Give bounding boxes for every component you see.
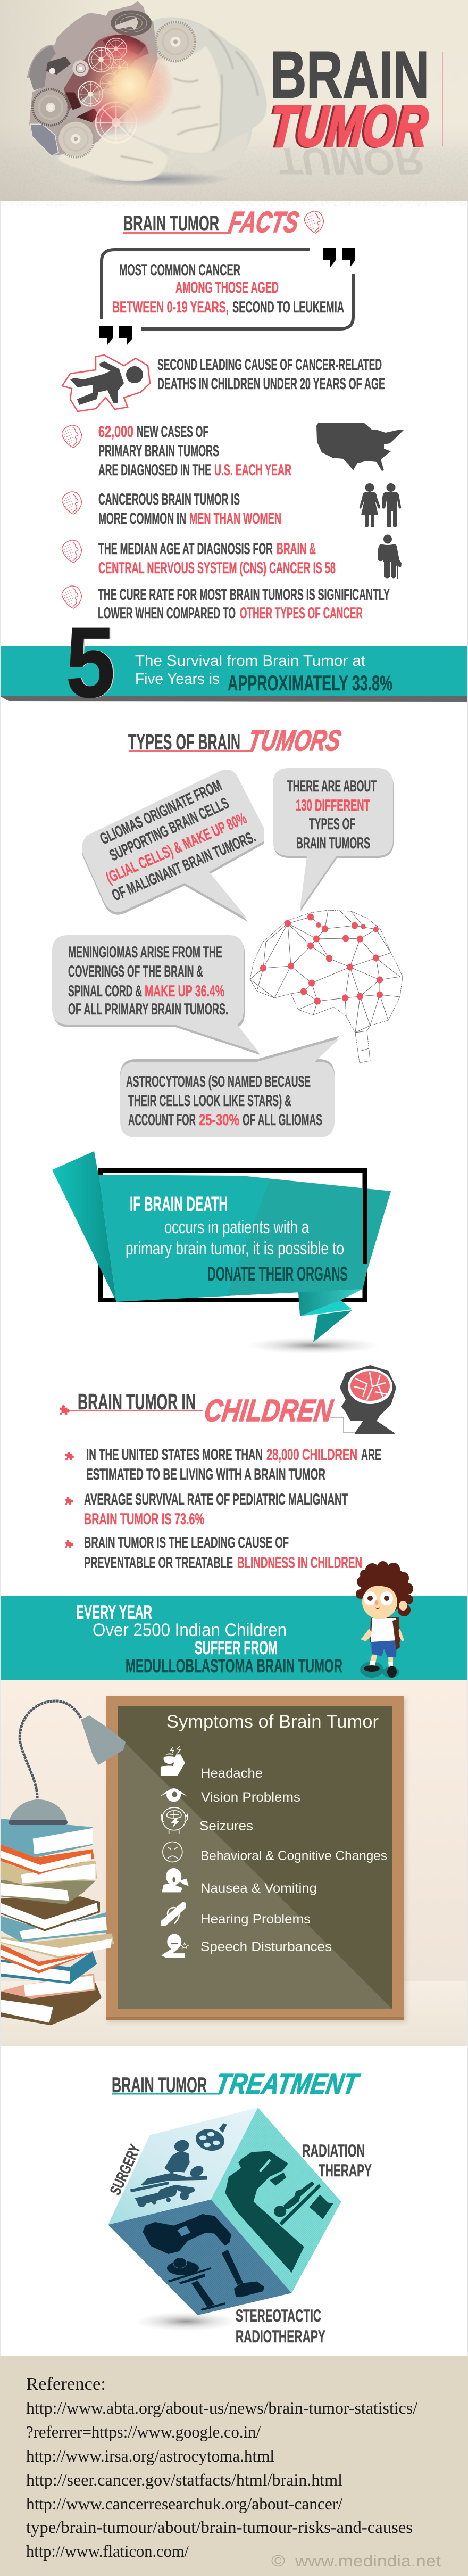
gear: bottom xyxy=(57,120,94,157)
survival banner: APPROXIMATELY 33.8% xyxy=(228,672,392,695)
icon: person vomiting xyxy=(162,1868,189,1892)
chalkboard xyxy=(106,1696,404,2020)
symptom: nausea: Nausea & Vomiting xyxy=(200,1881,317,1896)
icon: brain xyxy=(62,492,81,514)
label: stereotactic radiotherapy: RADIOTHERAPY xyxy=(236,2327,325,2346)
speech bubble: meningiomas: COVERINGS OF THE BRAIN & xyxy=(68,963,203,980)
label: radiation therapy: THERAPY xyxy=(319,2161,372,2180)
heading: brain tumor treatment: TREATMENT xyxy=(213,2067,362,2100)
survival banner: Five Years is xyxy=(135,671,220,688)
fact: men than women: MEN THAN WOMEN xyxy=(189,510,281,527)
speech bubble: gliomas: OF MALIGNANT BRAIN TUMORS. xyxy=(110,828,258,904)
speech bubble: 130 types: THERE ARE ABOUT xyxy=(287,778,377,795)
icon: elderly person with cane xyxy=(378,534,402,579)
icon: USA map xyxy=(316,423,404,471)
fact: 62,000 new cases: 62,000 xyxy=(98,423,133,441)
glowing centre xyxy=(85,41,174,129)
fact: men than women: MORE COMMON IN xyxy=(98,510,186,527)
quote text xyxy=(112,261,344,316)
icon: brain xyxy=(305,211,323,233)
fact: 62,000 new cases: U.S. EACH YEAR xyxy=(214,461,291,479)
speech bubble: astrocytomas: THEIR CELLS LOOK LIKE STARS) & xyxy=(128,1092,291,1110)
panel: references: http://www.irsa.org/astrocytoma.html xyxy=(26,2446,274,2465)
mechanical plate xyxy=(27,1,158,156)
origami ribbon: brain death organ donation xyxy=(52,1151,391,1354)
icon: closing quote marks xyxy=(323,248,355,267)
fact: median age: THE MEDIAN AGE AT DIAGNOSIS FOR xyxy=(98,540,273,558)
watermark: www.medindia.net xyxy=(295,2552,441,2570)
panel: references: ?referrer=https://www.google.co.in/ xyxy=(26,2422,261,2441)
symptom: vision: Vision Problems xyxy=(201,1790,300,1805)
symptom: headache: Headache xyxy=(200,1766,263,1781)
icon: person with hand at mouth xyxy=(161,1934,189,1958)
fact: 62,000 new cases: PRIMARY BRAIN TUMORS xyxy=(98,442,219,460)
label: stereotactic radiotherapy: STEREOTACTIC xyxy=(236,2306,321,2325)
label: stereotactic radiotherapy xyxy=(236,2306,325,2346)
cube: treatment options xyxy=(107,2108,372,2346)
bullet: blindness: BLINDNESS IN CHILDREN xyxy=(237,1554,362,1572)
bullet: blindness: BRAIN TUMOR IS THE LEADING CAUSE OF xyxy=(84,1534,289,1551)
symptom: hearing xyxy=(161,1902,311,1927)
fact: median age: BRAIN & xyxy=(277,540,316,558)
speech bubble: 130 types: BRAIN TUMORS xyxy=(296,835,370,852)
illustration: desk lamp xyxy=(9,1701,126,1825)
survival banner xyxy=(0,606,468,718)
symptom: speech xyxy=(161,1934,332,1958)
quote text: AMONG THOSE AGED xyxy=(176,279,279,296)
heading: brain tumor facts: BRAIN TUMOR xyxy=(123,212,219,235)
label: radiation therapy: RADIATION xyxy=(302,2141,365,2160)
symptom: seizures xyxy=(161,1807,253,1834)
dark inner cavity xyxy=(64,35,149,110)
origami ribbon: brain death organ donation: occurs in patients with a xyxy=(164,1217,309,1237)
symptom: headache xyxy=(161,1746,263,1781)
speech bubble: 130 types xyxy=(273,768,393,909)
icon: head with lightning xyxy=(161,1807,187,1834)
icon: headache xyxy=(161,1746,185,1776)
heading: brain tumor treatment: BRAIN TUMOR xyxy=(112,2074,207,2097)
illustration: stack of books xyxy=(0,1819,114,2025)
icon: eye xyxy=(160,1788,187,1802)
origami ribbon: brain death organ donation: DONATE THEIR ORGANS xyxy=(207,1263,348,1285)
label: surgery: SURGERY xyxy=(107,2142,144,2198)
heading: brain tumor treatment xyxy=(112,2067,362,2100)
fact: cure rate xyxy=(62,586,390,622)
big number 5: 5 xyxy=(66,606,115,718)
bullet: 28,000 children: IN THE UNITED STATES MORE THAN xyxy=(86,1446,263,1464)
hero banner xyxy=(0,0,468,201)
gear: upper right xyxy=(156,22,195,61)
panel: references: http://www.cancerresearchuk.org/about-cancer/ xyxy=(26,2494,342,2513)
panel: references: http://www.abta.org/about-us/news/brain-tumor-statistics/ xyxy=(26,2398,417,2417)
icon: woman and man xyxy=(360,483,401,527)
icon: head with brain xyxy=(340,1366,396,1433)
speech bubble: meningiomas: OF ALL PRIMARY BRAIN TUMORS. xyxy=(68,1001,228,1018)
speech bubble: astrocytomas: ACCOUNT FOR xyxy=(128,1111,196,1129)
red tint zones xyxy=(85,30,151,135)
symptom: nausea xyxy=(162,1868,317,1896)
survival banner: The Survival from Brain Tumor at xyxy=(135,653,365,670)
fact: cure rate: OTHER TYPES OF CANCER xyxy=(240,605,363,622)
quote box xyxy=(99,248,355,345)
speech bubble: astrocytomas: OF ALL GLIOMAS xyxy=(243,1111,322,1129)
brain body xyxy=(48,17,267,181)
cube face: radiation xyxy=(211,2108,341,2293)
speech bubble: gliomas xyxy=(82,770,264,919)
heading: brain tumor facts xyxy=(123,205,323,238)
icon: body outline xyxy=(62,355,150,411)
speech bubble: 130 types: 130 DIFFERENT xyxy=(296,797,370,814)
quote text: BETWEEN 0-19 YEARS, xyxy=(112,299,229,316)
symptom: hearing: Hearing Problems xyxy=(200,1912,311,1927)
speech bubble: astrocytomas: 25-30% xyxy=(199,1111,239,1129)
panel: references: type/brain-tumour/about/brain-tumour-risks-and-causes xyxy=(26,2517,413,2537)
heading: types of brain tumors: TUMORS xyxy=(246,724,344,757)
speech bubble: gliomas: GLIOMAS ORIGINATE FROM xyxy=(97,777,224,848)
bullet: survival rate xyxy=(65,1491,348,1528)
origami ribbon: brain death organ donation: IF BRAIN DEATH xyxy=(130,1193,228,1216)
bullet: 28,000 children: 28,000 CHILDREN xyxy=(266,1446,357,1464)
banner: medulloblastoma: SUFFER FROM xyxy=(195,1638,278,1658)
cube face: surgery xyxy=(108,2108,258,2225)
watermark: © xyxy=(271,2552,285,2570)
fact: 62,000 new cases xyxy=(62,423,404,479)
panel: references: http://seer.cancer.gov/statfacts/html/brain.html xyxy=(26,2470,342,2489)
heading: types of brain tumors: TYPES OF BRAIN xyxy=(128,730,240,754)
speech bubble: meningiomas: MAKE UP 36.4% xyxy=(145,982,224,1000)
bullet: blindness: PREVENTABLE OR TREATABLE xyxy=(84,1554,233,1572)
banner: medulloblastoma: Over 2500 Indian Children xyxy=(93,1620,287,1640)
speech bubble: gliomas: (GLIAL CELLS) & MAKE UP 80% xyxy=(104,810,249,887)
banner: medulloblastoma: MEDULLOBLASTOMA BRAIN TUMOR xyxy=(126,1656,342,1677)
panel: symptoms classroom: Symptoms of Brain Tumor xyxy=(166,1712,379,1732)
symptom: speech: Speech Disturbances xyxy=(200,1939,332,1954)
banner: medulloblastoma xyxy=(0,1561,468,1680)
icon: frowning face xyxy=(163,1842,182,1862)
bullet: survival rate: BRAIN TUMOR IS 73.6% xyxy=(84,1510,204,1528)
icon: brain xyxy=(62,586,81,608)
origami ribbon: brain death organ donation: primary brain tumor, it is possible to xyxy=(126,1239,344,1259)
brain network illustration xyxy=(250,910,403,1063)
speech bubble: gliomas: SUPPORTING BRAIN CELLS xyxy=(107,794,232,864)
icon: brain xyxy=(62,540,81,563)
icon: ear with slash xyxy=(161,1902,186,1926)
gear: lower left xyxy=(32,89,69,125)
fact: 62,000 new cases: NEW CASES OF xyxy=(137,423,208,441)
cube shadow xyxy=(135,2311,238,2331)
speech bubble: astrocytomas: ASTROCYTOMAS (SO NAMED BECAUSE xyxy=(126,1073,311,1091)
symptom: behavioral changes: Behavioral & Cognitive Changes xyxy=(200,1848,387,1863)
wheel cogs xyxy=(72,38,170,143)
quote text: MOST COMMON CANCER xyxy=(119,261,240,279)
panel: references: http://www.flaticon.com/ xyxy=(26,2541,189,2561)
cube face: stereotactic xyxy=(108,2200,291,2315)
fact: men than women: CANCEROUS BRAIN TUMOR IS xyxy=(98,491,240,508)
icon: puzzle piece xyxy=(65,1452,74,1460)
fact: cure rate: LOWER WHEN COMPARED TO xyxy=(98,605,236,622)
fact: median age xyxy=(62,534,402,579)
illustration: schoolboy xyxy=(356,1561,413,1678)
bullet: 28,000 children: ESTIMATED TO BE LIVING WITH A BRAIN TUMOR xyxy=(86,1466,325,1483)
symptom: behavioral changes xyxy=(163,1842,387,1863)
speech bubble: meningiomas xyxy=(52,935,259,1052)
quote text: SECOND TO LEUKEMIA xyxy=(232,299,344,316)
icon: brain xyxy=(62,425,81,448)
spiral disc xyxy=(111,10,152,36)
heading: brain tumor in children: CHILDREN xyxy=(202,1393,336,1428)
bullet: 28,000 children xyxy=(65,1446,381,1483)
speech bubble: meningiomas: MENINGIOMAS ARISE FROM THE xyxy=(68,944,222,961)
fact: second leading cause xyxy=(62,355,385,411)
speech bubble: meningiomas: SPINAL CORD & xyxy=(68,982,142,1000)
symptom: vision xyxy=(160,1788,300,1805)
panel: references xyxy=(0,2356,468,2576)
speech bubble: astrocytomas xyxy=(120,1038,340,1137)
heading: types of brain tumors xyxy=(128,724,344,757)
icon: opening quote marks xyxy=(99,326,132,345)
icon: puzzle piece xyxy=(65,1540,73,1548)
symptom: seizures: Seizures xyxy=(199,1819,253,1834)
icon: puzzle piece xyxy=(60,1405,70,1415)
panel: references: Reference: xyxy=(26,2374,106,2394)
bullet: blindness xyxy=(65,1534,362,1572)
icon: puzzle piece xyxy=(65,1497,73,1505)
heading: brain tumor in children xyxy=(60,1366,396,1433)
illustration: brain with clockwork gears xyxy=(27,1,267,187)
heading: brain tumor in children: BRAIN TUMOR IN xyxy=(78,1389,196,1414)
banner: medulloblastoma: EVERY YEAR xyxy=(76,1602,152,1623)
fact: men than women xyxy=(62,483,401,527)
label: radiation therapy xyxy=(302,2141,372,2180)
panel: symptoms classroom xyxy=(0,1680,468,2046)
bullet: 28,000 children: ARE xyxy=(361,1446,381,1464)
heading: brain tumor facts: FACTS xyxy=(227,205,302,238)
fact: 62,000 new cases: ARE DIAGNOSED IN THE xyxy=(98,461,211,479)
speech bubble: 130 types: TYPES OF xyxy=(309,815,355,833)
